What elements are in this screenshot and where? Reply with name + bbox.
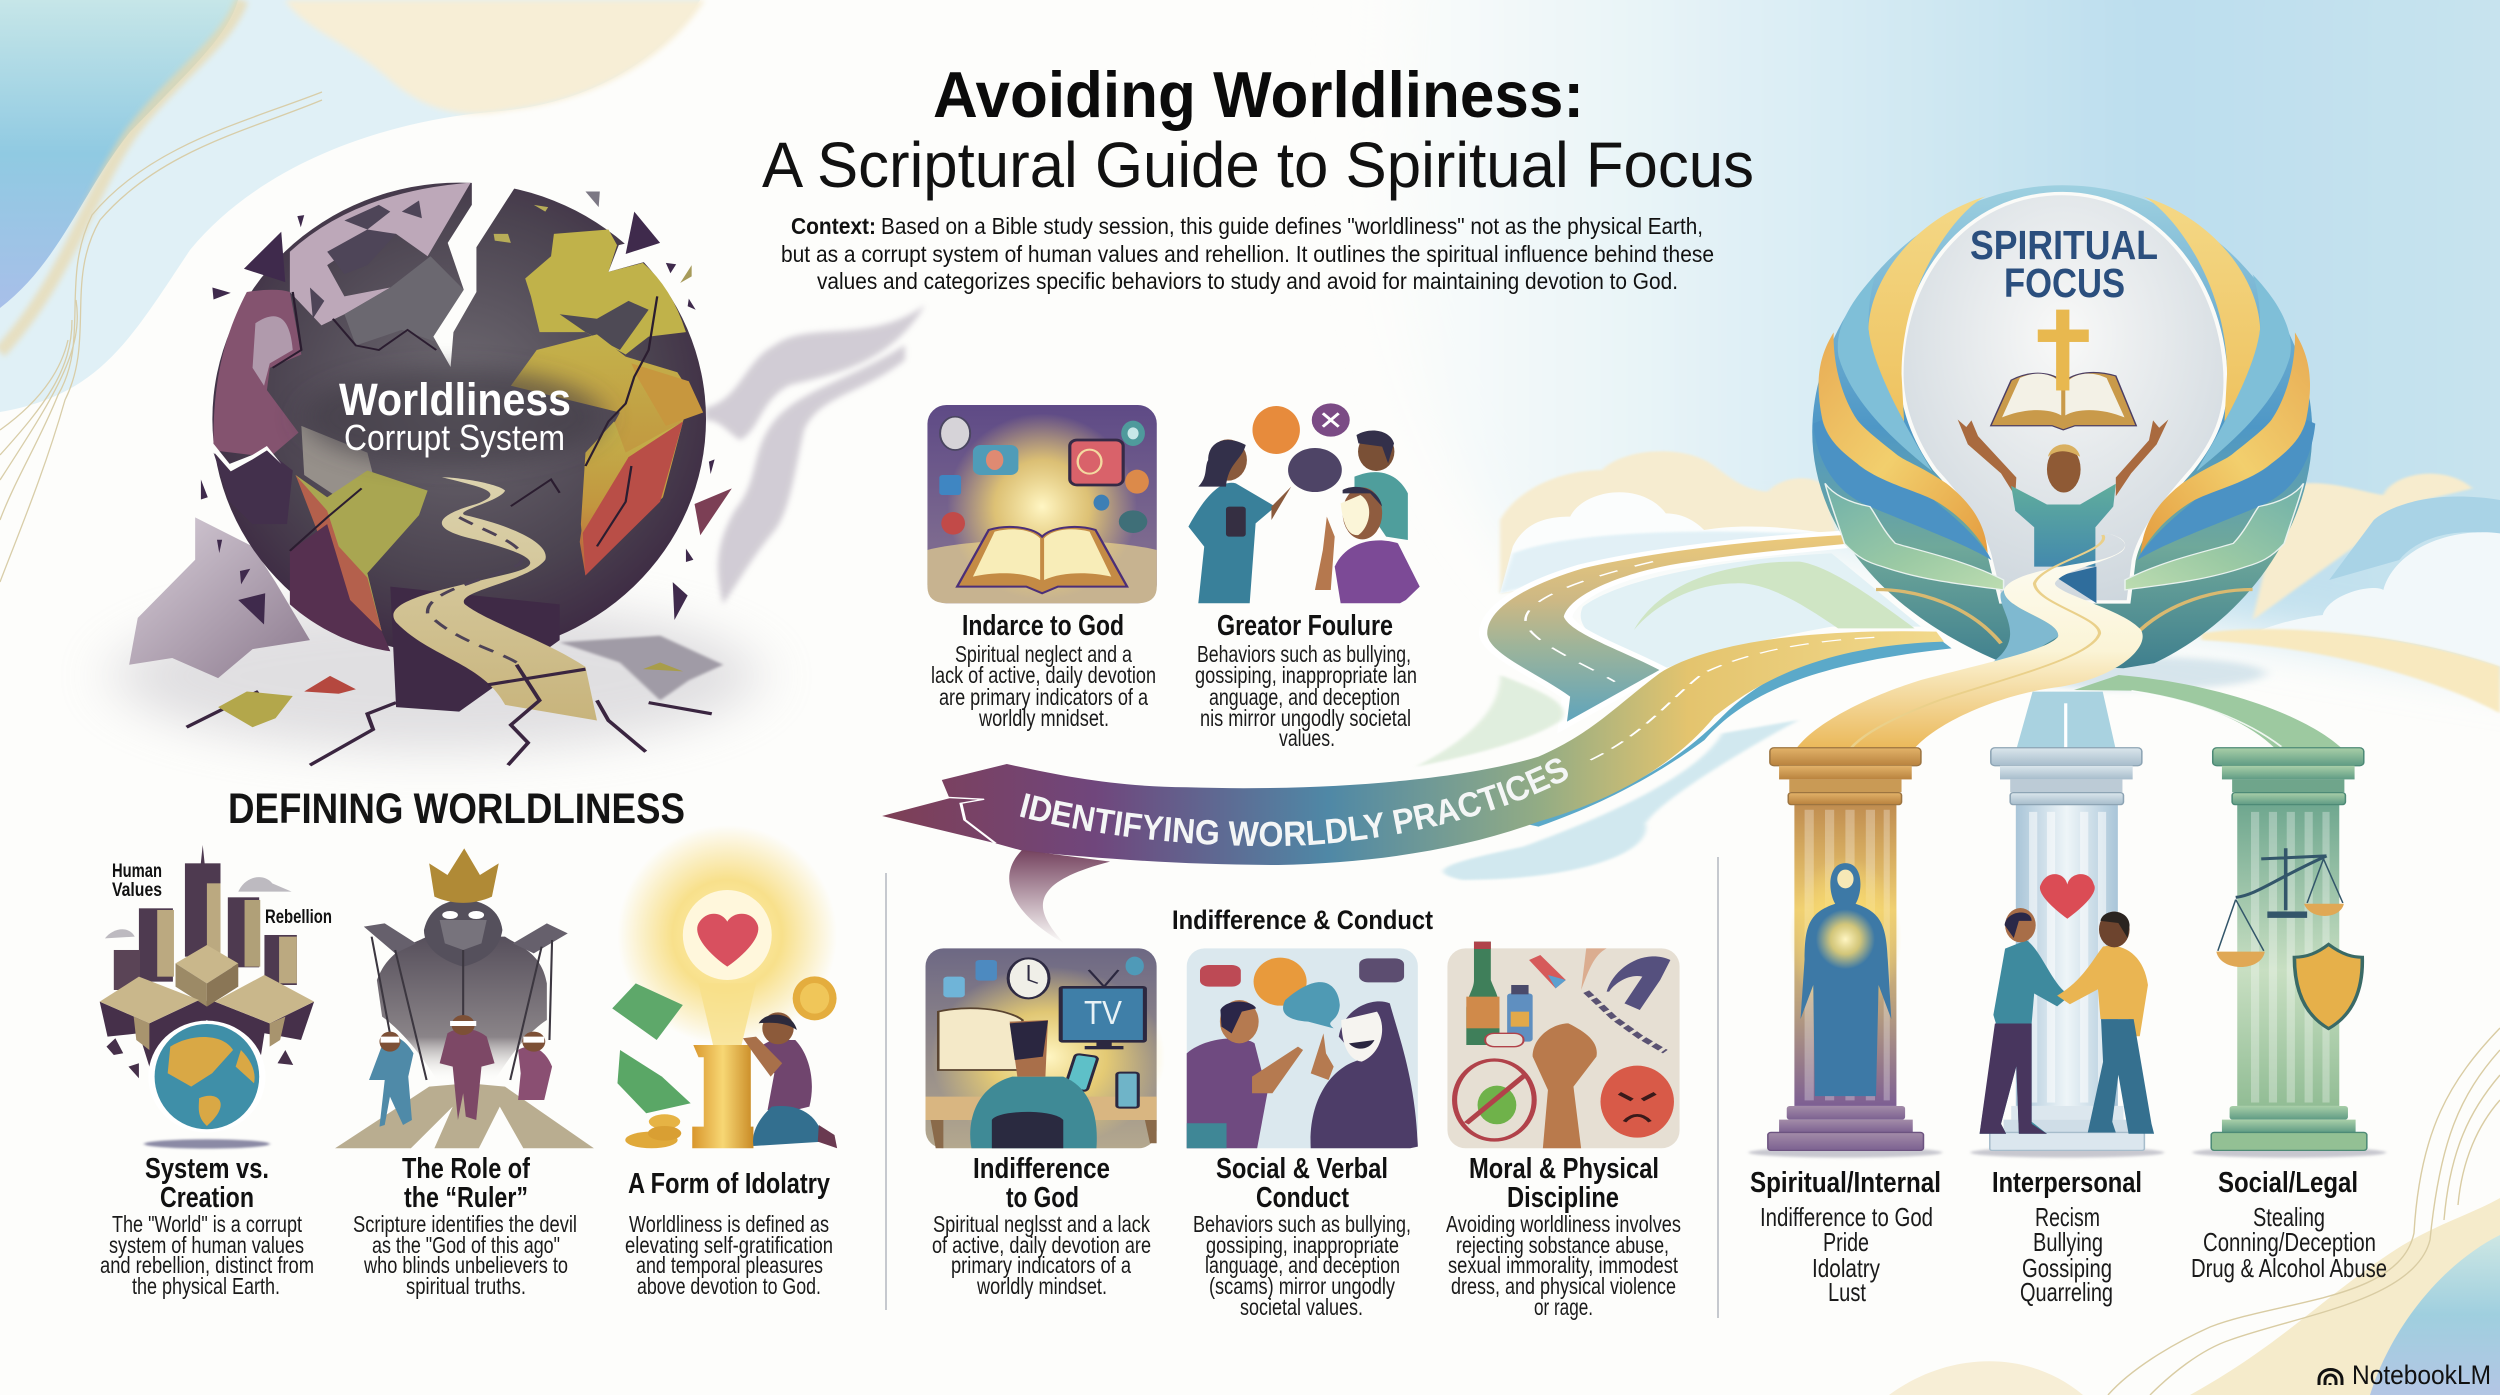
cross and open bible <box>1991 310 2136 430</box>
text: spiritual internal: Idolatry <box>1812 1253 1880 1283</box>
text: greator foulure: gossiping, inappropriate lan <box>1195 662 1417 688</box>
text: indarce to god: Indarce to God <box>962 610 1124 642</box>
icon labels: human values and rebellion: Human <box>112 861 162 882</box>
text: social and verbal conduct: gossiping, inappropriate <box>1206 1232 1399 1258</box>
panel: defining worldliness icons <box>100 825 837 1149</box>
heading: indifference and conduct: Indifference & Conduct <box>1172 905 1433 935</box>
land: upper left <box>290 183 471 325</box>
text: moral and physical discipline <box>1446 1153 1681 1320</box>
text: greator foulure: nis mirror ungodly societal <box>1200 705 1411 731</box>
rubble right <box>560 636 723 700</box>
worshipper with raised arms <box>1958 419 2168 567</box>
inner white oval <box>1902 194 2226 602</box>
icon: heart idol with money <box>612 825 837 1148</box>
text: social and verbal conduct: Conduct <box>1256 1182 1349 1214</box>
text: social and verbal conduct: (scams) mirror ungodly <box>1209 1273 1395 1299</box>
green band highlight <box>2131 691 2281 747</box>
pillar: social legal <box>2192 748 2386 1158</box>
text: moral and physical discipline: dress, and physical violence <box>1451 1273 1676 1299</box>
dark patch behind the road <box>2055 567 2096 603</box>
context paragraph: Based on a Bible study session, this guide defines "worldliness" not as the physical Earth, <box>881 213 1703 239</box>
text: social legal: Conning/Deception <box>2203 1227 2376 1257</box>
panel: three pillars <box>1748 748 2386 1158</box>
text: social legal: Stealing <box>2253 1202 2325 1232</box>
winding white road to pillar one <box>1797 533 2143 748</box>
text: system vs creation: and rebellion, distinct from <box>100 1252 314 1278</box>
land: africa <box>511 334 692 575</box>
soft shadow under the sphere <box>2010 657 2265 690</box>
text: indifference to god: worldly mindset. <box>976 1273 1107 1299</box>
text: social legal: Drug & Alcohol Abuse <box>2191 1253 2387 1283</box>
wing right <box>2125 196 2315 643</box>
text: the role of the ruler: who blinds unbelievers to <box>363 1252 568 1278</box>
text: greator foulure: Behaviors such as bullying, <box>1197 641 1411 667</box>
globe label <box>339 374 571 458</box>
land: right upper <box>525 229 686 354</box>
background: clouds near the spiritual focus sphere <box>1500 451 2500 713</box>
text: a form of idolatry <box>625 1168 833 1299</box>
icon: radiant blue figure <box>1789 857 1902 1019</box>
white edge of the upper road <box>1487 535 1844 722</box>
text halo <box>304 368 603 466</box>
lower purple shell <box>290 524 390 651</box>
text: social and verbal conduct: Behaviors such as bullying, <box>1193 1211 1411 1237</box>
text: social legal: Social/Legal <box>2218 1167 2358 1199</box>
text: system vs creation: The "World" is a corrupt <box>112 1211 302 1237</box>
globe label: Corrupt System <box>344 417 565 458</box>
illustration: fractured globe with road <box>115 176 758 765</box>
text: indifference to god: Spiritual neglsst and a lack <box>933 1211 1150 1237</box>
card: moral and physical discipline <box>1447 942 1680 1148</box>
text: greator foulure <box>1195 610 1417 751</box>
banner crack <box>946 797 995 843</box>
icon: heart <box>2040 874 2095 919</box>
text: moral and physical discipline: Moral & Physical <box>1469 1153 1659 1185</box>
text: the role of the ruler: The Role of <box>402 1153 530 1185</box>
kneeling worshipper <box>753 1040 812 1113</box>
rock chips <box>218 662 683 727</box>
text: spiritual internal: Pride <box>1823 1227 1869 1257</box>
text: indarce to god <box>931 610 1156 731</box>
background: bottom-right waves <box>1889 1028 2500 1395</box>
sphere label: FOCUS <box>2004 260 2125 306</box>
text: spiritual internal: Spiritual/Internal <box>1750 1167 1941 1199</box>
text: the role of the ruler: as the "God of this ago" <box>372 1232 560 1258</box>
small islets <box>494 205 548 243</box>
text: moral and physical discipline: rejecting sobstance abuse, <box>1456 1232 1669 1258</box>
land: left purple <box>213 290 301 457</box>
tv screen label: TV <box>1084 994 1122 1031</box>
subtitle: A Scriptural Guide to Spiritual Focus <box>762 129 1754 201</box>
text: moral and physical discipline: Discipline <box>1507 1182 1619 1214</box>
crack lines <box>273 292 657 551</box>
text: spiritual internal: Indifference to God <box>1760 1202 1933 1232</box>
rubble left <box>129 517 310 678</box>
text: greator foulure: Greator Foulure <box>1217 610 1393 642</box>
land: south america <box>296 471 428 631</box>
text: indifference to god: to God <box>1006 1182 1079 1214</box>
text: the role of the ruler: Scripture identifies the devil <box>353 1211 577 1237</box>
text: spiritual internal: Lust <box>1828 1277 1867 1307</box>
road center dashes <box>428 517 522 662</box>
text: interpersonal: Interpersonal <box>1992 1167 2142 1199</box>
text: system vs creation: system of human values <box>109 1232 304 1258</box>
banner dashes <box>1591 637 1875 760</box>
ribbons: banner and feeder bands <box>882 631 1952 943</box>
upper road surface <box>1487 535 1844 722</box>
text: indarce to god: worldly mnidset. <box>978 705 1109 731</box>
pillar: interpersonal <box>1970 748 2164 1158</box>
banner label: IDENTIFYING WORLDLY PRACTICES <box>1020 758 1568 846</box>
icon labels: human values and rebellion: Values <box>112 880 162 901</box>
text: social and verbal conduct <box>1193 1153 1411 1320</box>
blue band center line <box>2063 703 2068 748</box>
text: system vs creation <box>100 1153 314 1299</box>
text: interpersonal: Recism <box>2035 1202 2100 1232</box>
text: social and verbal conduct: Social & Verbal <box>1216 1153 1388 1185</box>
text: greator foulure: values. <box>1279 725 1335 751</box>
text: moral and physical discipline: Avoiding worldliness involves <box>1446 1211 1681 1237</box>
text: the role of the ruler: spiritual truths. <box>406 1273 526 1299</box>
text: a form of idolatry: elevating self-gratification <box>625 1232 833 1258</box>
text: moral and physical discipline: or rage. <box>1534 1294 1593 1320</box>
dark islets on upper-left land <box>310 200 422 319</box>
text: a form of idolatry: above devotion to God. <box>637 1273 821 1299</box>
text: indifference to god: Indifference <box>973 1153 1110 1185</box>
text: spiritual internal <box>1750 1167 1941 1307</box>
illustration: three people with mask and angry bubbles <box>1188 403 1420 603</box>
title: Avoiding Worldliness: <box>933 58 1584 131</box>
banner arrow ribbon <box>882 631 1944 865</box>
figure: left person shaking hands <box>1980 940 2070 1134</box>
text: the role of the ruler: the “Ruler” <box>404 1182 528 1214</box>
context paragraph: values and categorizes specific behaviors to study and avoid for maintaining devotion to God. <box>817 268 1678 294</box>
text: indarce to god: Spiritual neglect and a <box>955 641 1132 667</box>
globe body <box>212 183 706 656</box>
green loop <box>1634 562 1915 630</box>
land: mid plate <box>301 426 373 502</box>
card: book with distractions <box>927 405 1157 603</box>
banner tail <box>1009 850 1110 943</box>
context paragraph <box>781 213 1714 294</box>
dark gray plate <box>344 256 464 346</box>
text: indifference to god: of active, daily devotion are <box>932 1232 1151 1258</box>
green band <box>2074 675 2342 748</box>
egg base <box>1812 185 2312 668</box>
text: system vs creation: Creation <box>160 1182 254 1214</box>
text: indifference to god: primary indicators of a <box>951 1252 1131 1278</box>
road surface <box>1797 533 2143 748</box>
text: indarce to god: lack of active, daily devotion <box>931 662 1156 688</box>
text: the role of the ruler <box>353 1153 577 1299</box>
pale interior of the road loop <box>1581 553 1921 670</box>
ribbons: upper road and green loop <box>1487 535 1921 722</box>
text: social and verbal conduct: language, and deception <box>1205 1252 1400 1278</box>
ground shadow <box>115 600 758 752</box>
ground cracks <box>187 665 712 765</box>
text: moral and physical discipline: sexual immorality, immodest <box>1448 1252 1678 1278</box>
top crack wedge <box>433 176 517 367</box>
blue band <box>2017 692 2115 748</box>
text: social and verbal conduct: societal values. <box>1240 1294 1363 1320</box>
globe label: Worldliness <box>339 374 571 425</box>
text: indifference to god <box>932 1153 1151 1299</box>
illustration: spiritual focus sphere <box>1812 185 2315 668</box>
panel: lower illustrated cards <box>926 942 1680 1148</box>
context paragraph: Context: <box>791 213 876 239</box>
figure: right person shaking hands <box>2057 946 2148 1036</box>
text: indarce to god: are primary indicators of a <box>939 684 1148 710</box>
icon: gold shield <box>2294 944 2362 1029</box>
pale left swoosh <box>1416 675 1564 767</box>
icon: system vs creation city and earth <box>100 845 314 1149</box>
background: top-left waves <box>0 0 705 582</box>
card: social and verbal conduct <box>1187 948 1418 1148</box>
text: a form of idolatry: Worldliness is defined as <box>629 1211 829 1237</box>
icon: scales of justice <box>2216 848 2344 967</box>
text: greator foulure: anguage, and deception <box>1209 684 1400 710</box>
lower pale blue wash <box>1443 720 1799 880</box>
wing left <box>1813 196 2004 643</box>
context paragraph: but as a corrupt system of human values and rehellion. It outlines the spiritual influence behind these <box>781 241 1714 267</box>
text: a form of idolatry: A Form of Idolatry <box>628 1168 830 1200</box>
icon: ruler with puppet strings <box>335 848 594 1148</box>
text: system vs creation: System vs. <box>145 1153 269 1185</box>
icon labels: human values and rebellion <box>112 861 332 928</box>
flying shards <box>201 192 732 625</box>
smoke drifting from the globe <box>705 305 925 604</box>
side gaps in the shell <box>608 234 666 272</box>
sphere label: SPIRITUAL <box>1970 222 2158 268</box>
road center line <box>1851 535 2104 748</box>
card: indifference to god <box>926 948 1165 1148</box>
text: interpersonal: Quarreling <box>2020 1277 2113 1307</box>
background: sky at top right <box>1370 0 2500 680</box>
text: interpersonal: Bullying <box>2033 1227 2103 1257</box>
text: system vs creation: the physical Earth. <box>132 1273 280 1299</box>
text: social legal <box>2191 1167 2387 1283</box>
ribbons: bands from the sphere to pillars two and three <box>2010 657 2342 748</box>
icon labels: human values and rebellion: Rebellion <box>265 907 332 928</box>
panel: upper illustrated pair <box>927 403 1420 603</box>
text: a form of idolatry: and temporal pleasures <box>636 1252 823 1278</box>
text: interpersonal <box>1992 1167 2142 1307</box>
winding road on globe <box>393 477 597 720</box>
road shadow <box>1991 590 2058 663</box>
heading: defining worldliness: DEFINING WORLDLINESS <box>228 785 685 833</box>
upper road dashes <box>1526 562 1653 682</box>
blue band under banner <box>1523 637 1952 827</box>
pillar: spiritual internal <box>1748 748 1942 1158</box>
sphere label <box>1970 222 2158 306</box>
sea patch in right land <box>560 301 649 350</box>
text: interpersonal: Gossiping <box>2022 1253 2112 1283</box>
